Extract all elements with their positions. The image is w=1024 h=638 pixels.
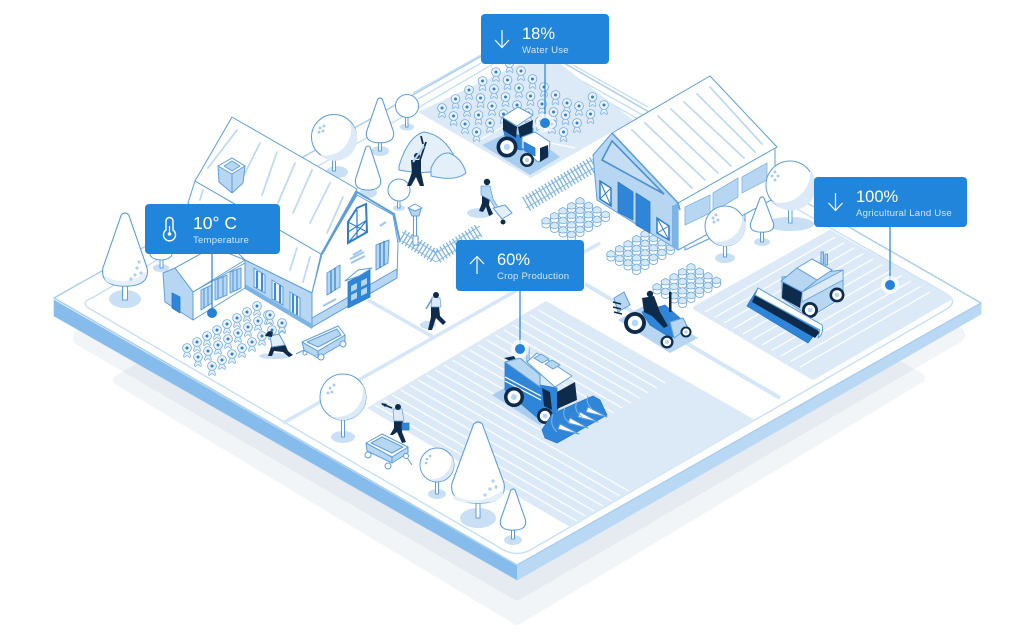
combine harvester: right field <box>747 252 844 343</box>
gable wall <box>312 195 398 327</box>
worker by flowers <box>259 331 293 359</box>
main roof <box>195 117 357 254</box>
tree: round trees front left <box>320 374 454 499</box>
tree: front cones <box>452 422 526 545</box>
roof <box>612 76 777 203</box>
cabbage plots <box>542 198 721 308</box>
tree: small cone behind temperature callout <box>150 248 172 272</box>
double door <box>348 270 370 308</box>
lamp post <box>408 204 422 245</box>
trees: cones behind house <box>355 98 394 198</box>
field: back flower field <box>418 52 633 178</box>
callout: crop production <box>456 240 584 358</box>
worker with shovel and bucket <box>381 403 409 443</box>
lower roof <box>188 181 321 293</box>
callout: water use <box>481 14 609 132</box>
front wall <box>593 133 678 250</box>
callout: crop production: Crop Production <box>497 271 569 282</box>
barn <box>593 76 777 250</box>
roads <box>283 55 780 423</box>
tractor: back field <box>482 107 560 175</box>
callout: temperature: 10° C <box>193 213 237 233</box>
chimney <box>218 158 245 193</box>
callout: temperature <box>145 204 280 318</box>
callout: water use: Water Use <box>522 45 569 56</box>
house <box>188 117 400 329</box>
field: central crop field <box>367 301 755 527</box>
rock piles with worker <box>399 132 466 186</box>
worker on road <box>420 292 446 330</box>
cart front field <box>365 434 412 469</box>
callout: agricultural land use: 100% <box>856 188 899 206</box>
small annex building <box>163 247 245 320</box>
side wall <box>678 148 775 250</box>
tree: cone by barn <box>750 197 774 246</box>
flower rows: back field <box>438 59 608 142</box>
combine harvester: central field <box>492 348 607 443</box>
tractor with farmer <box>613 291 698 353</box>
picket fence by house <box>402 226 480 262</box>
lean-to <box>685 202 745 250</box>
worker with wheelbarrow <box>467 179 512 224</box>
callout: water use: 18% <box>522 25 555 43</box>
background shadow layers <box>81 85 957 620</box>
field: right wheat field <box>695 232 950 378</box>
tree: round trees by barn <box>705 161 816 263</box>
callout: crop production: 60% <box>497 251 530 269</box>
callout: agricultural land use <box>814 177 967 294</box>
cart near house <box>296 326 346 360</box>
callout: agricultural land use: Agricultural Land Use <box>856 208 952 219</box>
platform base <box>54 36 981 580</box>
tree: left large cone <box>103 213 147 308</box>
side wall windows <box>254 268 300 318</box>
gable x window <box>348 204 367 243</box>
callout: temperature: Temperature <box>193 235 249 246</box>
flower rows: front of house <box>183 302 286 376</box>
gable windows <box>327 265 340 295</box>
side wall <box>245 260 312 328</box>
trees: round trees behind house <box>312 94 418 211</box>
picket fence by barn <box>526 159 594 208</box>
